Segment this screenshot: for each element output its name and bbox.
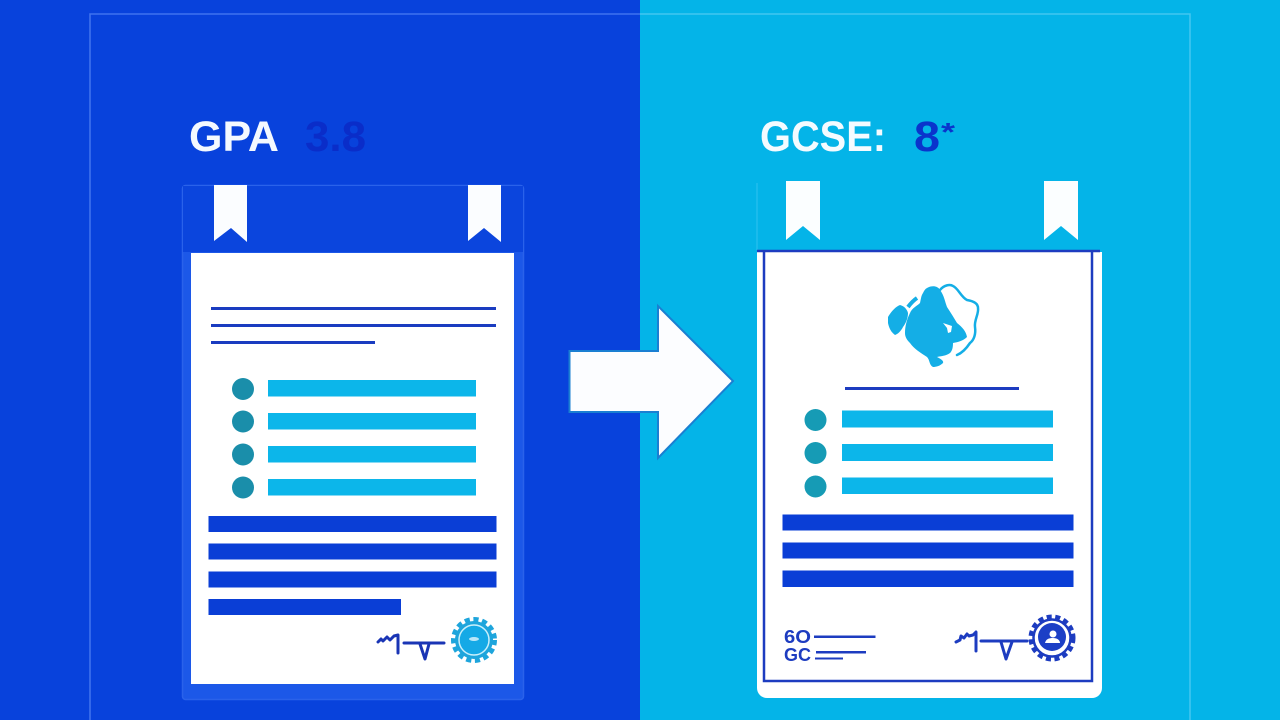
icon: right bookmark [468,185,501,242]
heading: GCSE 8*: 8 [914,113,940,161]
heading: GCSE 8*: GCSE: [760,113,886,161]
heading: GPA 3.8: GPA [189,113,279,161]
icon: right bookmark [1044,181,1078,240]
icon: cyan emblem [888,285,978,367]
blue border [757,251,1100,681]
text lines [211,307,496,344]
icon: blue seal [1031,617,1073,659]
icon: left bookmark [214,185,247,242]
panel: GPA transcript document [182,185,524,700]
heading: GPA 3.8 [189,113,366,161]
icon: cyan seal [454,620,494,660]
header outline [756,183,758,250]
divider line [845,387,1019,390]
arrow [570,306,733,458]
panel: GCSE certificate document [757,181,1102,698]
list bars [842,410,1053,494]
document backing [182,186,524,700]
list bars [268,380,476,496]
panel: right cyan background [640,0,1280,720]
paragraph bars [208,516,496,615]
paragraph bars [782,514,1074,587]
list bullets [232,378,254,498]
small issuer marks: GC [784,645,811,665]
header band [183,186,523,252]
heading: GPA 3.8: 3.8 [305,113,366,161]
heading: GCSE 8* [760,113,956,161]
panel: left blue background [0,0,640,720]
list bullets [804,409,826,498]
icon: left bookmark [786,181,820,240]
small issuer marks [784,627,876,665]
signature [956,632,1027,659]
small issuer marks: 6O [784,627,811,647]
signature [378,635,444,659]
white paper [191,253,514,684]
white card [757,252,1102,698]
heading: GCSE 8*: * [941,117,956,147]
